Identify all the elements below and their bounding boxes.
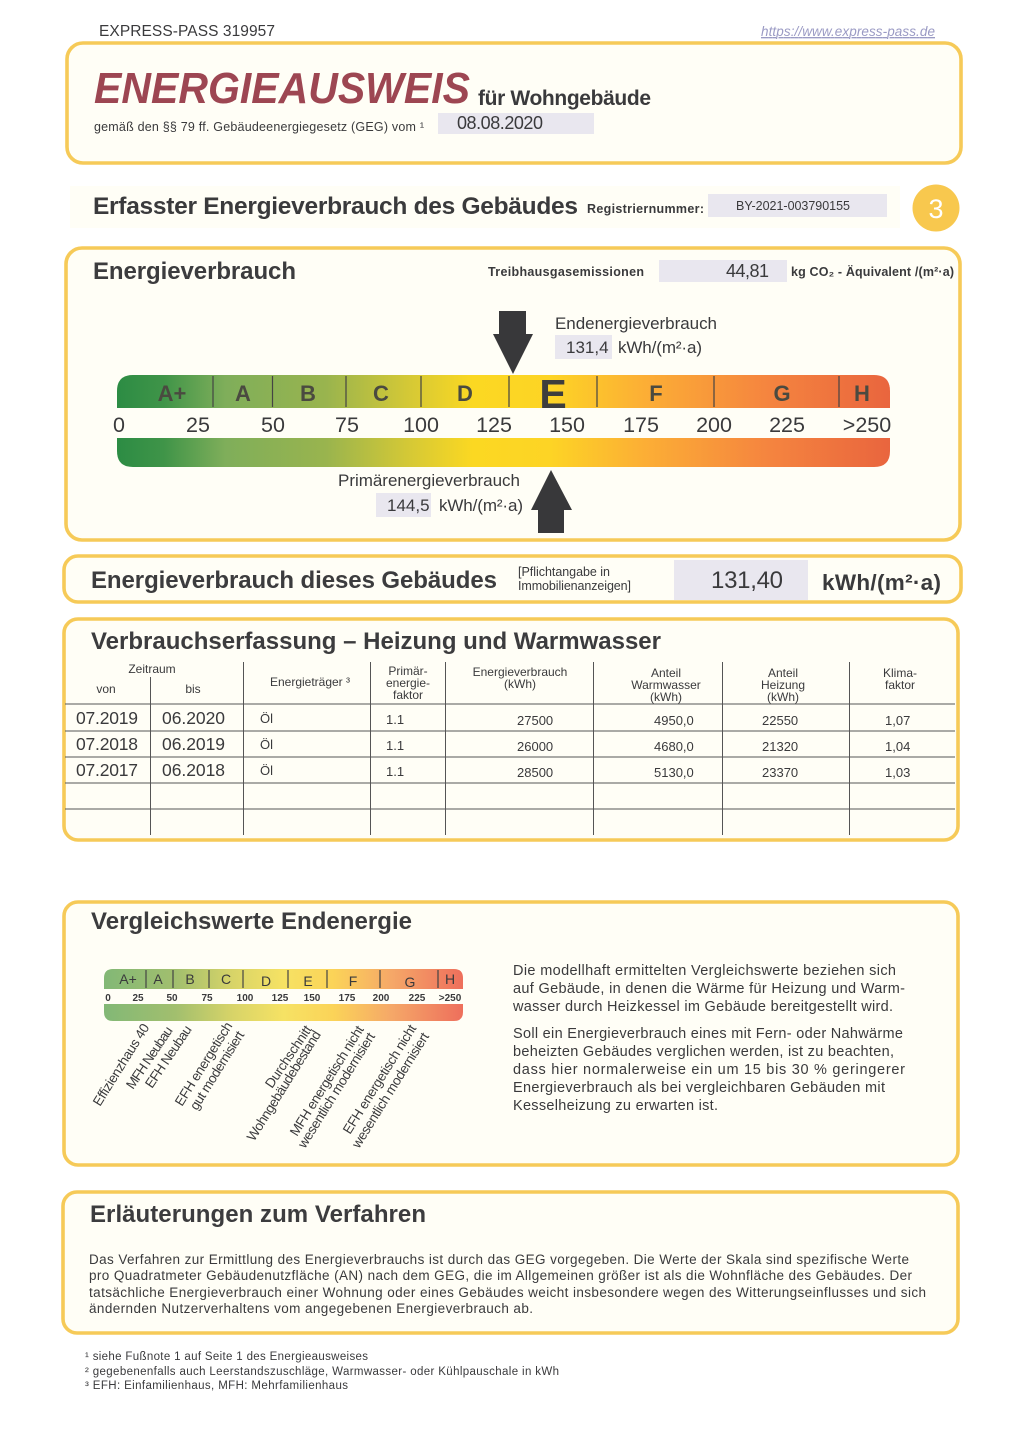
table header: energie- bbox=[386, 676, 430, 690]
greenhouse gas emissions: 44,81 bbox=[726, 261, 769, 281]
rotated building type labels: MFH Neubau bbox=[123, 1024, 176, 1092]
greenhouse gas emissions: kg CO₂ - Äquivalent /(m²·a) bbox=[791, 264, 954, 279]
table header: Primär- bbox=[388, 664, 428, 678]
table header: Heizung bbox=[761, 678, 805, 692]
explanation text: beheizten Gebäudes verglichen werden, ist zu beachten, bbox=[513, 1044, 894, 1060]
primary energy label: Primärenergieverbrauch bbox=[338, 471, 520, 490]
panel: Verbrauchserfassung bbox=[64, 619, 958, 840]
table rows: Öl bbox=[260, 737, 273, 752]
footnotes: ³ EFH: Einfamilienhaus, MFH: Mehrfamilienhaus bbox=[85, 1380, 348, 1392]
table header: Energieträger ³ bbox=[270, 675, 350, 689]
top scale bar: A bbox=[235, 381, 251, 406]
final energy label bbox=[555, 314, 717, 359]
scale numbers: 150 bbox=[549, 413, 585, 437]
table rows: 4950,0 bbox=[654, 713, 694, 728]
mini scale: >250 bbox=[439, 993, 462, 1004]
rotated building type labels: EFH energetisch nicht bbox=[340, 1022, 419, 1137]
top scale bar: H bbox=[854, 381, 870, 406]
table rows: 06.2019 bbox=[162, 734, 225, 754]
mini scale: B bbox=[185, 971, 195, 987]
badge: page 3 bbox=[912, 184, 960, 232]
panel: Erläuterungen zum Verfahren bbox=[63, 1192, 958, 1333]
mini scale: 25 bbox=[132, 993, 144, 1004]
primary energy label: 144,5 bbox=[387, 496, 430, 515]
mini scale: 125 bbox=[272, 993, 289, 1004]
panel: Energieverbrauch dieses Gebäudes: 131,40 bbox=[711, 567, 783, 594]
heading: Energieverbrauch bbox=[93, 258, 296, 285]
final energy label: kWh/(m²·a) bbox=[618, 338, 702, 357]
scale numbers: 100 bbox=[403, 413, 439, 437]
explanation text: wasser durch Heizkessel im Gebäude bereitgestellt wird. bbox=[512, 999, 893, 1015]
panel: Vergleichswerte Endenergie bbox=[64, 902, 958, 1165]
date field: 08.08.2020 bbox=[457, 113, 543, 133]
mini scale: 0 bbox=[105, 993, 111, 1004]
panel: Energieverbrauch dieses Gebäudes: Immobilienanzeigen] bbox=[518, 579, 631, 593]
table rows bbox=[76, 708, 910, 780]
rotated building type labels: EFH energetisch bbox=[172, 1019, 235, 1109]
table rows: Öl bbox=[260, 763, 273, 778]
explanation text: Kesselheizung zu erwarten ist. bbox=[513, 1098, 718, 1114]
mini scale bbox=[104, 969, 463, 1021]
table rows: 22550 bbox=[762, 713, 798, 728]
mini scale: 200 bbox=[373, 993, 390, 1004]
mini scale: A bbox=[153, 971, 163, 987]
mini scale: H bbox=[445, 971, 455, 987]
top scale bar bbox=[117, 371, 890, 417]
scale numbers: 25 bbox=[186, 413, 210, 437]
table header: (kWh) bbox=[504, 677, 536, 691]
rotated building type labels bbox=[90, 1019, 432, 1151]
panel: Energieverbrauch dieses Gebäudes bbox=[64, 556, 961, 602]
scale numbers: 50 bbox=[261, 413, 285, 437]
table rows: 06.2018 bbox=[162, 760, 225, 780]
mini scale: 100 bbox=[237, 993, 254, 1004]
page header line: https://www.express-pass.de bbox=[761, 24, 935, 39]
mini scale: D bbox=[261, 973, 271, 989]
table header: Anteil bbox=[768, 666, 798, 680]
panel: Energieverbrauch dieses Gebäudes: Energieverbrauch dieses Gebäudes bbox=[91, 567, 497, 594]
rotated building type labels: Durchschnitt bbox=[262, 1022, 315, 1091]
title: ENERGIEAUSWEIS bbox=[94, 64, 470, 113]
table rows: 26000 bbox=[517, 739, 553, 754]
mini scale: C bbox=[221, 971, 231, 987]
explanation text: Soll ein Energieverbrauch eines mit Fern- oder Nahwärme bbox=[513, 1026, 903, 1042]
mini scale: A+ bbox=[119, 971, 137, 987]
mini scale: 150 bbox=[304, 993, 321, 1004]
table rows: 28500 bbox=[517, 765, 553, 780]
arrow: primary energy bbox=[531, 470, 572, 533]
scale numbers: 0 bbox=[113, 413, 125, 437]
panel: Energieverbrauch bbox=[66, 248, 960, 540]
table header bbox=[96, 662, 917, 704]
panel: Energieverbrauch dieses Gebäudes: [Pflichtangabe in bbox=[518, 565, 610, 579]
heading: Vergleichswerte Endenergie bbox=[91, 908, 412, 935]
top scale bar: F bbox=[649, 381, 663, 406]
mini scale: 50 bbox=[166, 993, 178, 1004]
primary energy label bbox=[338, 471, 523, 517]
scale numbers: 175 bbox=[623, 413, 659, 437]
explanation text: Energieverbrauch als bei vergleichbaren Gebäuden mit bbox=[513, 1080, 885, 1096]
table rows: 1.1 bbox=[386, 712, 404, 727]
rotated building type labels: EFH Neubau bbox=[142, 1023, 195, 1091]
table header: faktor bbox=[885, 678, 915, 692]
bottom scale bar bbox=[117, 438, 890, 467]
top scale bar: D bbox=[457, 381, 473, 406]
footnotes: ² gegebenenfalls auch Leerstandszuschläge, Warmwasser- oder Kühlpauschale in kWh bbox=[85, 1366, 559, 1378]
page header line: EXPRESS-PASS 319957 bbox=[99, 23, 275, 40]
rotated building type labels: gut modernisiert bbox=[187, 1028, 247, 1113]
footnotes: ¹ siehe Fußnote 1 auf Seite 1 des Energieausweises bbox=[85, 1351, 368, 1363]
table rows: 1.1 bbox=[386, 738, 404, 753]
table header: bis bbox=[185, 682, 201, 696]
explanation text bbox=[89, 1252, 926, 1316]
table rows: Öl bbox=[260, 711, 273, 726]
rotated building type labels: Wohngebäudebestand bbox=[244, 1028, 324, 1144]
scale numbers: >250 bbox=[843, 413, 891, 437]
top scale bar: E bbox=[539, 371, 567, 417]
mini scale: E bbox=[303, 973, 313, 989]
table header: faktor bbox=[393, 688, 423, 702]
footnotes bbox=[85, 1351, 559, 1392]
rotated building type labels: wesentlich modernisiert bbox=[348, 1030, 432, 1151]
heading: Verbrauchserfassung – Heizung und Warmwasser bbox=[91, 628, 661, 655]
table header: Zeitraum bbox=[128, 662, 176, 676]
table header: (kWh) bbox=[650, 690, 682, 704]
table header: Klima- bbox=[883, 666, 917, 680]
mini scale: F bbox=[349, 973, 357, 989]
table rows: 07.2019 bbox=[76, 708, 138, 728]
table rows: 1.1 bbox=[386, 764, 404, 779]
scale numbers: 200 bbox=[696, 413, 732, 437]
greenhouse gas emissions: Treibhausgasemissionen bbox=[488, 265, 644, 279]
table rows: 1,04 bbox=[885, 739, 910, 754]
panel: title header bbox=[67, 43, 961, 163]
table rows: 5130,0 bbox=[654, 765, 694, 780]
rotated building type labels: wesentlich modernisiert bbox=[294, 1030, 378, 1151]
scale numbers: 225 bbox=[769, 413, 805, 437]
table header: (kWh) bbox=[767, 690, 799, 704]
scale numbers: 75 bbox=[335, 413, 359, 437]
table rows: 1,07 bbox=[885, 713, 910, 728]
section heading: Erfasster Energieverbrauch: Erfasster Energieverbrauch des Gebäudes bbox=[93, 193, 578, 220]
table bbox=[65, 662, 955, 835]
explanation text: tatsächliche Energieverbrauch einer Wohnung oder eines Gebäudes weicht insbesondere wegen des Witterungseinflusses und sich bbox=[89, 1285, 926, 1300]
scale numbers: 125 bbox=[476, 413, 512, 437]
rotated building type labels: Effizienzhaus 40 bbox=[90, 1021, 152, 1109]
date field bbox=[438, 113, 594, 134]
page header line bbox=[99, 23, 935, 40]
explanation text: ändernden Nutzerverhaltens vom angegebenen Energieverbrauch ab. bbox=[89, 1301, 533, 1316]
mini scale: 225 bbox=[409, 993, 426, 1004]
table header: Anteil bbox=[651, 666, 681, 680]
final energy label: 131,4 bbox=[566, 338, 609, 357]
arrow: final energy bbox=[493, 311, 533, 374]
table rows: 27500 bbox=[517, 713, 553, 728]
explanation text bbox=[512, 963, 905, 1114]
top scale bar: A+ bbox=[158, 381, 186, 406]
table rows: 4680,0 bbox=[654, 739, 694, 754]
section heading: Erfasster Energieverbrauch bbox=[70, 186, 900, 228]
explanation text: pro Quadratmeter Gebäudenutzfläche (AN) nach dem GEG, die im Allgemeinen größer ist als die Wohnfläche des Gebäudes. Der bbox=[89, 1268, 913, 1283]
table rows: 06.2020 bbox=[162, 708, 225, 728]
badge: page 3: 3 bbox=[928, 194, 944, 224]
mini scale: G bbox=[405, 974, 415, 990]
explanation text: Die modellhaft ermittelten Vergleichswerte beziehen sich bbox=[513, 963, 896, 979]
greenhouse gas emissions bbox=[488, 260, 954, 282]
explanation text: auf Gebäude, in denen die Wärme für Heizung und Warm- bbox=[513, 981, 905, 997]
mini scale: 175 bbox=[339, 993, 356, 1004]
final energy label: Endenergieverbrauch bbox=[555, 314, 717, 333]
primary energy label: kWh/(m²·a) bbox=[439, 496, 523, 515]
table rows: 23370 bbox=[762, 765, 798, 780]
table rows: 1,03 bbox=[885, 765, 910, 780]
section heading: Erfasster Energieverbrauch: BY-2021-003790155 bbox=[736, 199, 850, 213]
rotated building type labels: MFH energetisch nicht bbox=[287, 1023, 367, 1139]
table rows: 07.2018 bbox=[76, 734, 138, 754]
explanation text: Das Verfahren zur Ermittlung des Energieverbrauchs ist durch das GEG vorgegeben. Die Werte der Skala sind spezifische Werte bbox=[89, 1252, 909, 1267]
scale numbers bbox=[113, 413, 891, 437]
table rows: 21320 bbox=[762, 739, 798, 754]
table header: von bbox=[96, 682, 116, 696]
top scale bar: B bbox=[300, 381, 316, 406]
panel: Energieverbrauch dieses Gebäudes: kWh/(m²·a) bbox=[822, 570, 941, 595]
legal basis: gemäß den §§ 79 ff. Gebäudeenergiegesetz (GEG) vom ¹ bbox=[94, 120, 424, 134]
table rows: 07.2017 bbox=[76, 760, 138, 780]
table header: Energieverbrauch bbox=[473, 665, 567, 679]
section heading: Erfasster Energieverbrauch: Registriernummer: bbox=[587, 202, 704, 216]
table header: Warmwasser bbox=[631, 678, 701, 692]
top scale bar: C bbox=[373, 381, 389, 406]
heading: Erläuterungen zum Verfahren bbox=[90, 1201, 426, 1228]
explanation text: dass hier normalerweise ein um 15 bis 30 % geringerer bbox=[513, 1062, 905, 1078]
top scale bar: G bbox=[773, 381, 791, 406]
subtitle: für Wohngebäude bbox=[478, 87, 651, 110]
mini scale: 75 bbox=[201, 993, 213, 1004]
